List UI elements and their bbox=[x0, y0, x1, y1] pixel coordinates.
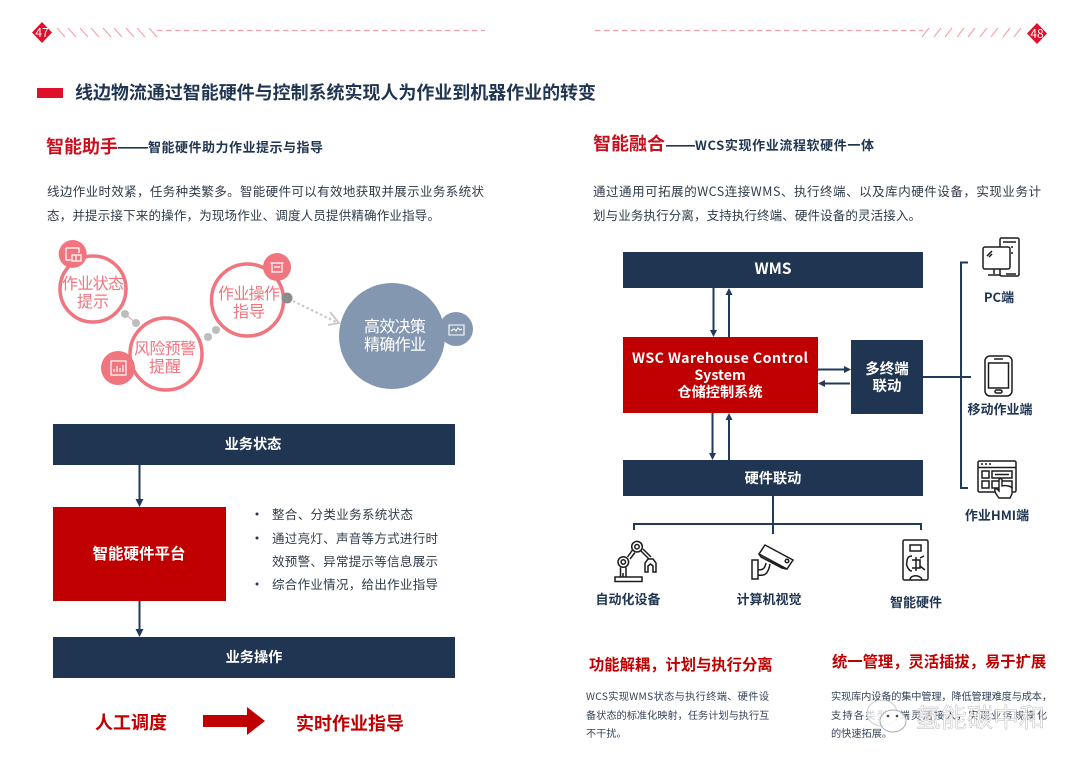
icon: robot arm bbox=[615, 541, 656, 582]
bar: hardware link bbox=[623, 460, 923, 496]
bubble: decision: 高效决策 bbox=[364, 313, 426, 337]
box: multi-terminal bbox=[851, 340, 923, 414]
red box: platform: 智能硬件平台 bbox=[92, 542, 186, 564]
bullet list: 通过亮灯、声音等方式进行时 bbox=[272, 528, 438, 547]
hardware bracket bbox=[634, 496, 921, 534]
bar: business status bbox=[53, 424, 455, 465]
bubble: risk bbox=[101, 318, 202, 390]
label: HMI terminal: 作业HMI端 bbox=[965, 505, 1029, 524]
right intro text bbox=[593, 181, 1041, 224]
feature: unified management: 的快速拓展。 bbox=[831, 725, 892, 740]
connectors bbox=[121, 301, 339, 341]
main title: 线边物流通过智能硬件与控制系统实现人为作业到机器作业的转变 bbox=[75, 79, 596, 105]
bottom left caption: manual to real-time: 实时作业指导 bbox=[296, 710, 404, 736]
icon: PC bbox=[983, 238, 1019, 276]
label: mobile terminal: 移动作业端 bbox=[967, 399, 1033, 418]
header decoration: right page number bbox=[595, 23, 1047, 44]
label: automation: 自动化设备 bbox=[595, 589, 661, 608]
WCS architecture diagram bbox=[595, 238, 1033, 611]
bubble: operation: 作业操作 bbox=[218, 280, 280, 304]
left heading: 智能助手 bbox=[46, 133, 118, 159]
arrow bbox=[136, 465, 144, 507]
left flow chart bbox=[53, 424, 455, 678]
bottom left caption: manual to real-time: 人工调度 bbox=[95, 709, 167, 735]
bubble flow diagram bbox=[59, 240, 473, 390]
bubble: decision: 精确作业 bbox=[364, 331, 426, 355]
bottom left caption: manual to real-time bbox=[95, 707, 404, 736]
terminal bracket bbox=[923, 262, 971, 488]
bullet list: 整合、分类业务系统状态 bbox=[272, 504, 413, 523]
left heading bbox=[46, 133, 323, 159]
red box: WCS: System bbox=[694, 365, 746, 385]
feature: decoupling: 备状态的标准化映射，任务计划与执行互 bbox=[586, 707, 769, 722]
bubble: status: 作业状态 bbox=[62, 270, 124, 294]
right heading: 智能融合 bbox=[593, 130, 665, 156]
header decoration: right page number: 48 bbox=[1030, 25, 1044, 42]
red box: WCS bbox=[623, 337, 818, 413]
right heading: WCS实现作业流程软硬件一体 bbox=[695, 135, 874, 154]
header decoration: left page number: 47 bbox=[35, 24, 49, 41]
box: multi-terminal: 联动 bbox=[872, 375, 902, 396]
arrow bbox=[136, 601, 144, 637]
arrows between boxes bbox=[709, 288, 851, 460]
red box: WCS: 仓储控制系统 bbox=[677, 382, 763, 402]
bullet list: 综合作业情况，给出作业指导 bbox=[272, 574, 438, 593]
bullet list: 效预警、异常提示等信息展示 bbox=[272, 551, 438, 570]
header decoration: left page number bbox=[32, 22, 485, 43]
feature: unified management: 实现库内设备的集中管理，降低管理难度与成本， bbox=[831, 688, 1052, 703]
red box: platform bbox=[53, 507, 226, 601]
bubble: risk: 提醒 bbox=[149, 353, 181, 377]
feature: decoupling: 功能解耦，计划与执行分离 bbox=[589, 653, 773, 675]
watermark: 氢能碳中和 bbox=[915, 698, 1045, 735]
bubble: status: 提示 bbox=[77, 288, 109, 312]
bar: business status: 业务状态 bbox=[225, 434, 281, 454]
label: smart hardware: 智能硬件 bbox=[890, 592, 942, 611]
feature: decoupling: 不干扰。 bbox=[586, 725, 627, 740]
left heading: 智能硬件助力作业提示与指导 bbox=[148, 137, 323, 156]
feature: unified management: 统一管理，灵活插拔，易于扩展 bbox=[832, 650, 1046, 672]
bar: WMS: WMS bbox=[754, 257, 792, 279]
feature: decoupling bbox=[586, 653, 773, 740]
feature: decoupling: WCS实现WMS状态与执行终端、硬件设 bbox=[586, 688, 769, 703]
bubble: decision bbox=[339, 283, 473, 389]
icon: HMI bbox=[978, 461, 1016, 498]
feature: unified management: 支持各类型终端灵活接入，实现业务规模化 bbox=[831, 707, 1047, 722]
red box: WCS: WSC Warehouse Control bbox=[632, 348, 809, 368]
right intro text: 通过通用可拓展的WCS连接WMS、执行终端、以及库内硬件设备，实现业务计 bbox=[593, 181, 1041, 200]
bubble: operation: 指导 bbox=[233, 298, 265, 322]
left intro text: 线边作业时效紧，任务种类繁多。智能硬件可以有效地获取并展示业务系统状 bbox=[47, 181, 484, 200]
feature: unified management bbox=[831, 650, 1052, 740]
left intro text: 态，并提示接下来的操作，为现场作业、调度人员提供精确作业指导。 bbox=[47, 205, 440, 224]
left intro text bbox=[47, 181, 484, 224]
bubble: risk: 风险预警 bbox=[134, 335, 196, 359]
bar: hardware link: 硬件联动 bbox=[745, 468, 801, 488]
right intro text: 划与业务执行分离，支持执行终端、硬件设备的灵活接入。 bbox=[593, 205, 921, 224]
bar: business operation: 业务操作 bbox=[226, 647, 282, 667]
bubble: status bbox=[59, 240, 126, 322]
right heading bbox=[593, 130, 874, 156]
bubble: operation bbox=[212, 253, 292, 336]
box: multi-terminal: 多终端 bbox=[865, 358, 909, 379]
bullet list bbox=[256, 504, 438, 593]
bar: business operation bbox=[53, 637, 455, 678]
bar: WMS bbox=[623, 252, 923, 288]
icon: phone bbox=[985, 356, 1012, 396]
label: PC: PC端 bbox=[984, 287, 1014, 306]
label: computer vision: 计算机视觉 bbox=[736, 589, 802, 608]
icon: smart hardware bbox=[903, 540, 928, 580]
icon: camera bbox=[752, 545, 793, 579]
